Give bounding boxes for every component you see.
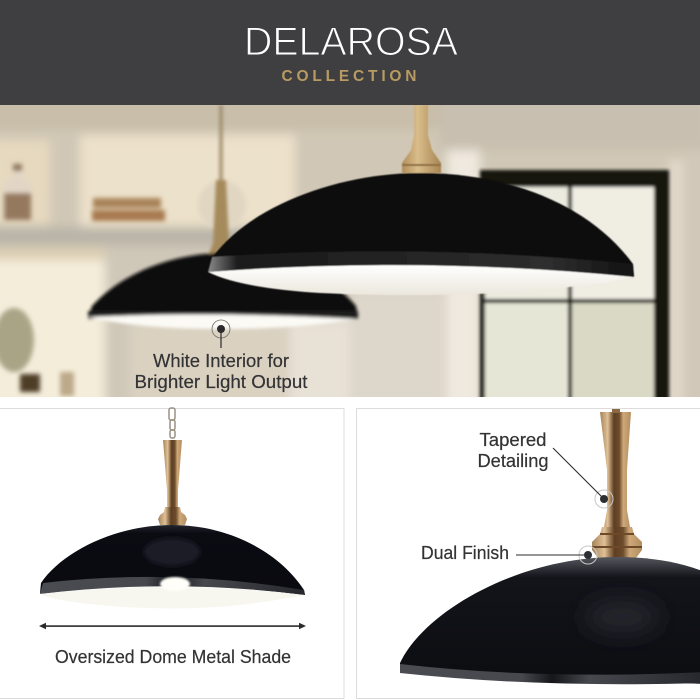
shade	[209, 173, 634, 277]
panel: room photo	[0, 90, 700, 410]
window	[480, 170, 669, 405]
back pendant lamp	[87, 105, 358, 329]
callout: white interior: White Interior for	[153, 351, 289, 371]
panel: oversized dome shade	[0, 408, 344, 698]
shade	[40, 525, 305, 595]
callout: white interior	[134, 320, 308, 392]
panel: close-up details	[356, 408, 700, 698]
interior	[40, 587, 305, 608]
stem	[158, 440, 187, 525]
vase	[4, 168, 30, 217]
rim band	[400, 664, 700, 684]
rim band	[40, 577, 305, 595]
rim band	[208, 251, 634, 277]
callout: dual finish: Dual Finish	[421, 543, 509, 563]
shelf objects	[0, 164, 246, 396]
shade	[400, 557, 700, 684]
subtitle: Collection: COLLECTION	[282, 68, 416, 85]
books	[93, 198, 161, 208]
stem	[402, 105, 441, 173]
callout: tapered detailing	[478, 430, 613, 508]
callout: white interior: Brighter Light Output	[134, 372, 308, 392]
bowl ornament	[199, 184, 245, 220]
blurred room background	[0, 90, 700, 410]
callout: tapered detailing: Detailing	[478, 451, 548, 471]
callout: dual finish	[421, 543, 597, 564]
interior	[208, 265, 634, 295]
front pendant lamp	[208, 105, 634, 295]
chain	[169, 408, 175, 438]
title: Delarosa: DELAROSA	[244, 20, 458, 64]
arrow: width	[39, 623, 306, 629]
label: oversized dome metal shade: Oversized Dome Metal Shade	[55, 647, 291, 667]
plant	[0, 308, 34, 372]
header band	[0, 0, 700, 105]
stem	[600, 412, 631, 527]
callout: tapered detailing: Tapered	[480, 430, 546, 450]
